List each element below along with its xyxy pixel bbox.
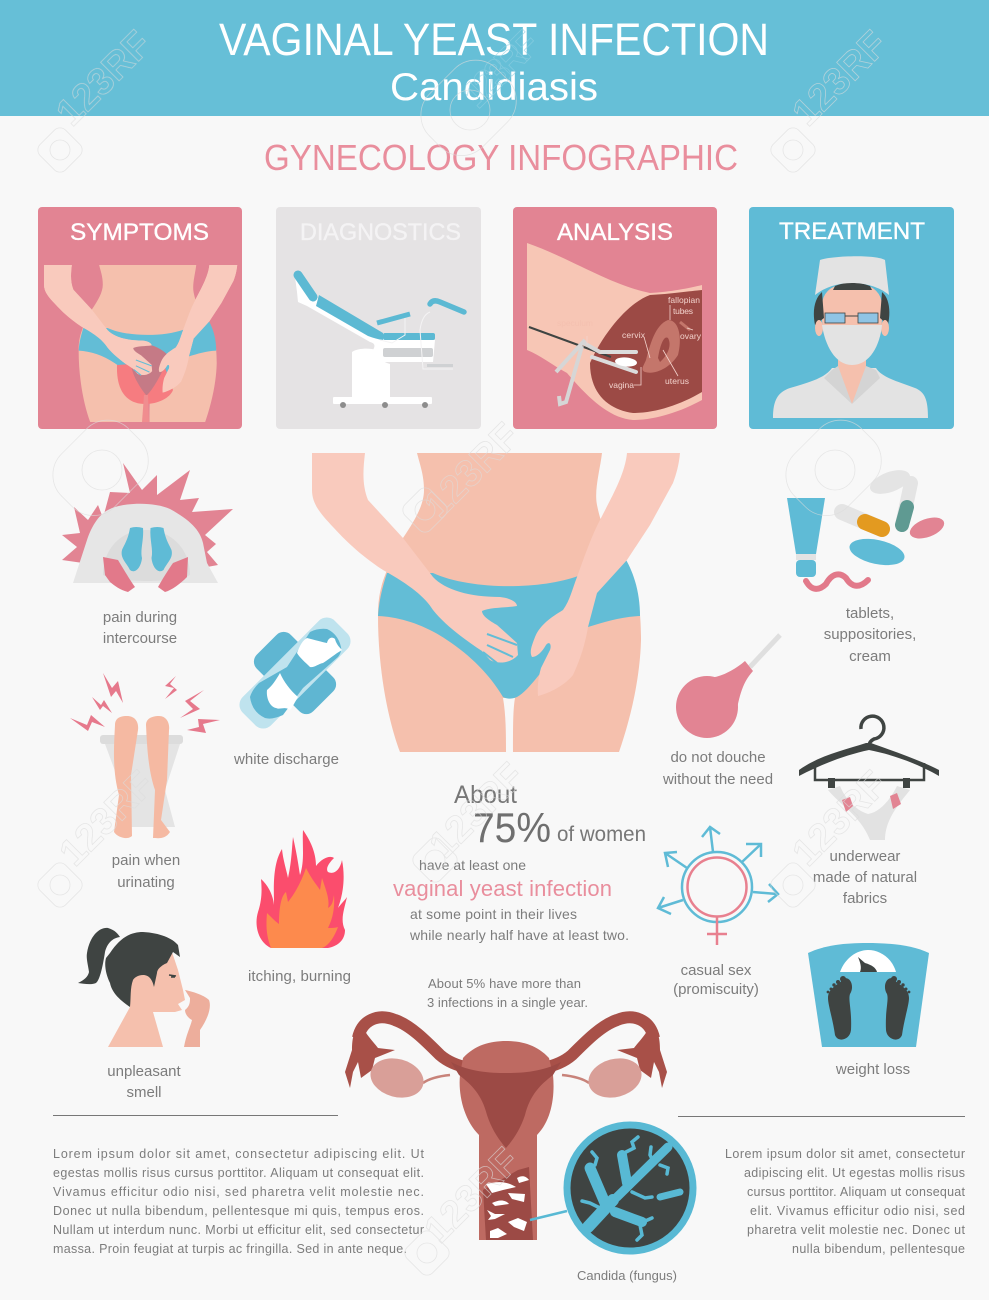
symptom: pain when urinating: [70, 673, 220, 891]
right paragraph: adipiscing elit. Ut egestas mollis risus: [744, 1166, 965, 1180]
statistic text block: vaginal yeast infection: [393, 876, 612, 901]
statistic text block: of women: [557, 823, 646, 846]
panel: treatment: [749, 207, 954, 429]
left paragraph: [53, 1115, 425, 1256]
anatomy labels: tubes: [673, 306, 693, 316]
symptom: itching, burning: [248, 830, 351, 985]
label: do not douche: [670, 749, 766, 766]
right paragraph: nulla bibendum, pellentesque: [792, 1242, 965, 1256]
anatomy labels: uterus: [665, 376, 689, 386]
label: Candida (fungus): [577, 1268, 677, 1283]
statistic text block: have at least one: [419, 857, 526, 873]
diagnostics heading: DIAGNOSTICS: [300, 219, 461, 246]
treatment: casual sex warning symbol: [658, 827, 778, 998]
watermark: 123RF: [49, 23, 160, 134]
label: pain when: [112, 852, 180, 869]
symptom: pain during intercourse: [62, 463, 233, 647]
left paragraph: Lorem ipsum dolor sit amet, consectetur adipiscing elit. Ut: [53, 1147, 425, 1161]
anatomy labels: vagina: [609, 380, 634, 390]
label: intercourse: [103, 630, 177, 647]
left paragraph: egestas mollis risus cursus porttitor. Aliquam ut consequat elit.: [53, 1166, 424, 1180]
label: urinating: [117, 874, 175, 891]
label: suppositories,: [824, 626, 916, 643]
treatment: do not douche: [662, 635, 780, 788]
section heading: GYNECOLOGY INFOGRAPHIC: [264, 137, 738, 178]
label: pain during: [103, 609, 177, 626]
main figure: [312, 453, 680, 752]
right paragraph: pharetra velit molestie nec. Donec ut: [747, 1223, 966, 1237]
watermark: 123RF: [417, 1140, 528, 1251]
anatomy labels: fallopian: [668, 295, 700, 305]
anatomy labels: [557, 295, 702, 390]
symptom: white discharge: [221, 599, 369, 768]
small figure with inflamed area: [44, 265, 237, 422]
treatment: natural fabric underwear on hanger: [799, 716, 939, 907]
label: unpleasant: [107, 1063, 182, 1080]
statistic text block: while nearly half have at least two.: [409, 927, 629, 943]
label: tablets,: [846, 605, 894, 622]
watermark: 123RF: [52, 763, 163, 874]
statistic text block: About 5% have more than: [428, 976, 581, 991]
label: underwear: [830, 848, 900, 865]
subtitle: Candidiasis: [390, 66, 598, 109]
treatment heading: TREATMENT: [779, 218, 925, 245]
anatomy labels: speculum: [557, 318, 593, 328]
statistic text block: [393, 781, 646, 1010]
uterus anatomy diagram: [345, 1017, 667, 1240]
label: fabrics: [843, 890, 887, 907]
label: made of natural: [813, 869, 917, 886]
statistic text block: 3 infections in a single year.: [427, 995, 588, 1010]
anatomy labels: ovary: [680, 331, 702, 341]
label: (promiscuity): [673, 981, 759, 998]
watermark: 123RF: [785, 23, 896, 134]
discharge patches: [486, 1176, 529, 1238]
right paragraph: Lorem ipsum dolor sit amet, consectetur: [725, 1147, 965, 1161]
statistic text block: About: [454, 781, 517, 809]
watermark: 123RF: [455, 23, 548, 116]
candida magnified circle: [530, 1125, 693, 1283]
watermark: 123RF: [417, 415, 528, 526]
label: without the need: [662, 771, 773, 788]
panel: symptoms: [38, 207, 242, 429]
label: itching, burning: [248, 968, 351, 985]
gynecological chair: [295, 275, 464, 408]
lightning bolts: [70, 673, 220, 733]
cross-section illustration: [527, 243, 702, 420]
right paragraph: cursus porttitor. Aliquam ut consequat: [747, 1185, 966, 1199]
panel: diagnostics: [276, 207, 481, 429]
symptom: unpleasant smell: [78, 928, 210, 1101]
watermark: 123RF: [422, 755, 533, 866]
watermark: 123RF: [785, 763, 896, 874]
label: white discharge: [233, 751, 339, 768]
left paragraph: Vivamus efficitur odio nisi, sed pharetra velit molestie nec.: [53, 1185, 424, 1199]
panel: analysis: [513, 207, 717, 429]
main title: VAGINAL YEAST INFECTION: [219, 14, 769, 65]
right paragraph: [678, 1116, 966, 1256]
right paragraph: elit. Vivamus efficitur odio nisi, sed: [750, 1204, 965, 1218]
label: weight loss: [835, 1061, 910, 1078]
left paragraph: massa. Proin feugiat at turpis ac fringilla. Sed in ante neque.: [53, 1242, 407, 1256]
treatment: tablets, suppositories, cream: [787, 465, 947, 665]
left paragraph: Donec ut nulla bibendum, pellentesque mi quis, tempus eros.: [53, 1204, 424, 1218]
symptoms heading: SYMPTOMS: [70, 219, 209, 246]
header banner: [0, 0, 989, 116]
left paragraph: Nullam ut interdum nunc. Morbi ut efficitur elit, sed consectetur: [53, 1223, 424, 1237]
statistic text block: at some point in their lives: [410, 906, 577, 922]
statistic text block: 75%: [473, 804, 551, 851]
doctor illustration: [773, 256, 928, 418]
treatment: weight loss scale: [808, 943, 929, 1078]
label: smell: [126, 1084, 162, 1101]
analysis heading: ANALYSIS: [557, 219, 673, 246]
label: casual sex: [681, 962, 752, 979]
anatomy labels: cervix: [622, 330, 646, 340]
label: cream: [849, 648, 891, 665]
